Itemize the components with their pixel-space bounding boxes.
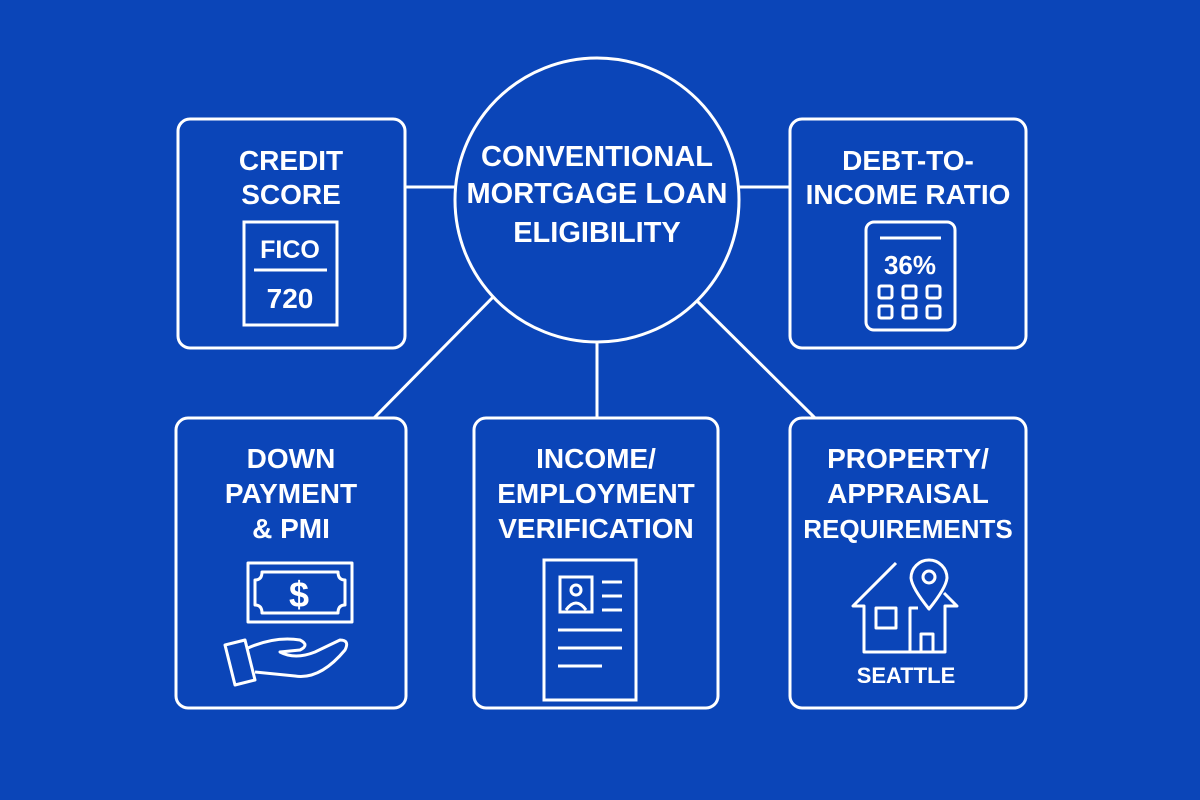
panel: down payment & PMI: PAYMENT xyxy=(225,478,357,509)
icon: FICO card: FICO xyxy=(260,236,320,264)
panel: property/appraisal requirements: REQUIREMENTS xyxy=(803,514,1013,544)
center circle: title: CONVENTIONAL xyxy=(481,141,713,173)
icon: calculator: 36% xyxy=(884,250,936,280)
panel: credit score: CREDIT xyxy=(239,145,343,176)
panel: down payment & PMI: DOWN xyxy=(247,443,335,474)
panel: income/employment verification xyxy=(474,418,718,708)
panel: property/appraisal requirements xyxy=(790,418,1026,708)
panel: credit score xyxy=(178,119,405,348)
panel: income/employment verification: INCOME/ xyxy=(536,443,656,474)
panel: property/appraisal requirements: PROPERTY/ xyxy=(827,443,989,474)
panel: debt-to-income ratio: INCOME RATIO xyxy=(806,179,1010,210)
center circle: title: ELIGIBILITY xyxy=(513,217,681,249)
icon: FICO card: 720 xyxy=(267,283,313,314)
panel: credit score: SCORE xyxy=(241,179,341,210)
icon: calculator xyxy=(866,222,955,330)
panel: debt-to-income ratio: DEBT-TO- xyxy=(842,145,974,176)
panel: down payment & PMI xyxy=(176,418,406,708)
panel: income/employment verification: VERIFICATION xyxy=(498,513,694,544)
icon: house with pin xyxy=(853,560,957,652)
panel: down payment & PMI: & PMI xyxy=(252,513,330,544)
panel: property/appraisal requirements: APPRAISAL xyxy=(827,478,989,509)
panel: income/employment verification: EMPLOYMENT xyxy=(497,478,695,509)
panel: property/appraisal requirements: SEATTLE xyxy=(857,663,955,688)
panel: debt-to-income ratio xyxy=(790,119,1026,348)
center circle: title: MORTGAGE LOAN xyxy=(466,178,728,210)
center circle: title xyxy=(455,58,739,342)
icon: cash in hand: $ xyxy=(289,574,309,615)
icon: document xyxy=(544,560,636,700)
icon: cash in hand xyxy=(225,563,352,685)
icon: FICO card xyxy=(244,222,337,325)
